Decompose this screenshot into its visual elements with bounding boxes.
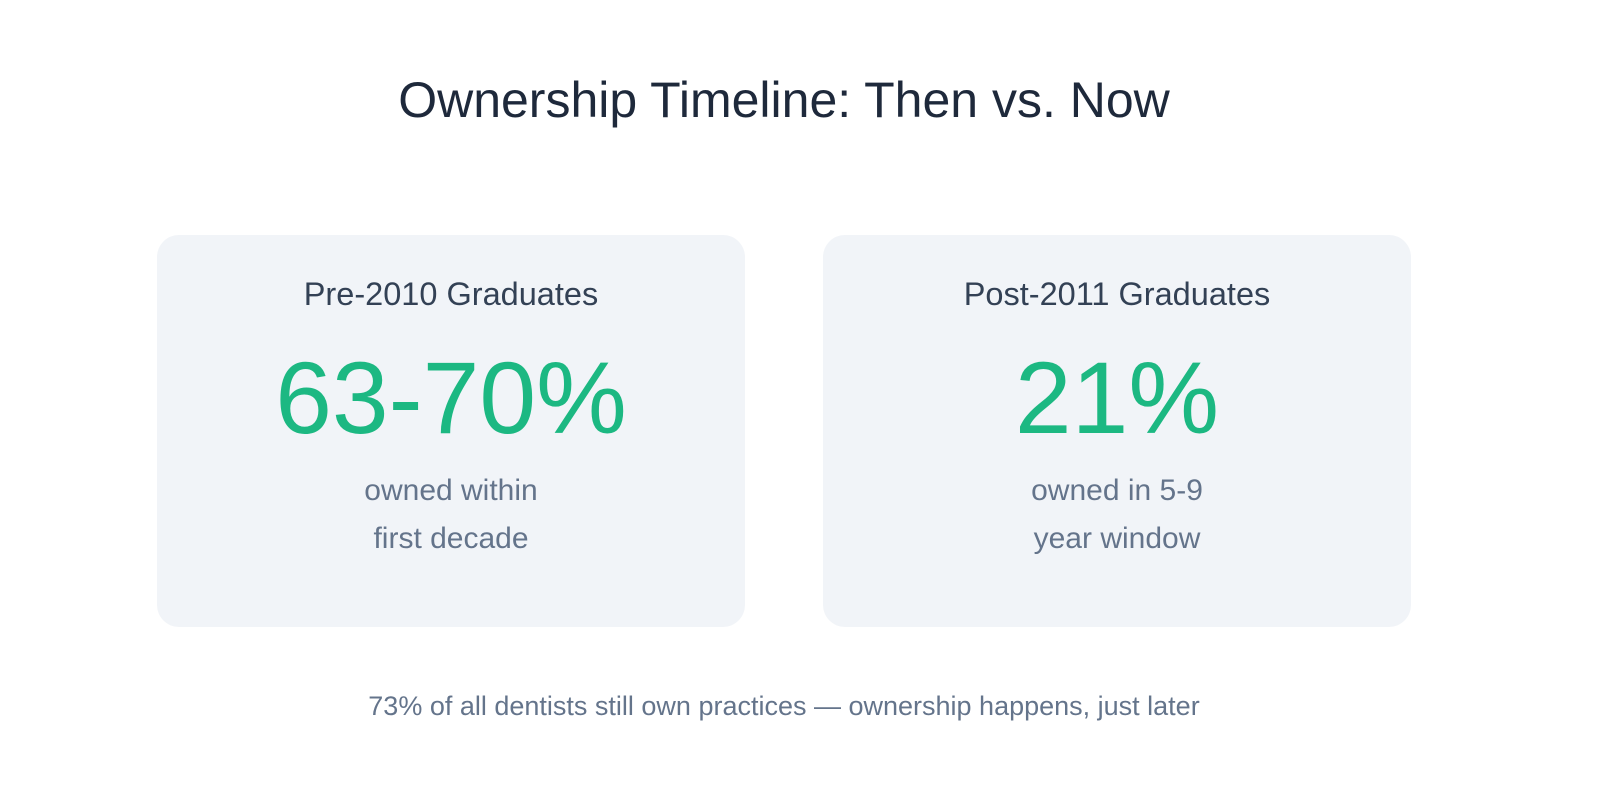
description: post-2011 (1031, 474, 1203, 555)
footer note: 73% of all dentists still own practices — ownership happens, just later (368, 691, 1200, 721)
description: pre-2010 (364, 474, 538, 555)
card heading: post-2011: Post-2011 Graduates (964, 276, 1270, 312)
description: pre-2010: first decade (373, 522, 529, 555)
big stat: 63-70%: 63-70% (275, 341, 627, 455)
description: post-2011: year window (1034, 522, 1200, 555)
description: pre-2010: owned within (364, 474, 538, 507)
big stat: 21%: 21% (1015, 341, 1219, 455)
panel: post-2011 (823, 235, 1411, 627)
panel: pre-2010 (157, 235, 745, 627)
title: Ownership Timeline: Then vs. Now (398, 72, 1170, 128)
card heading: pre-2010: Pre-2010 Graduates (304, 276, 598, 312)
description: post-2011: owned in 5-9 (1031, 474, 1203, 507)
